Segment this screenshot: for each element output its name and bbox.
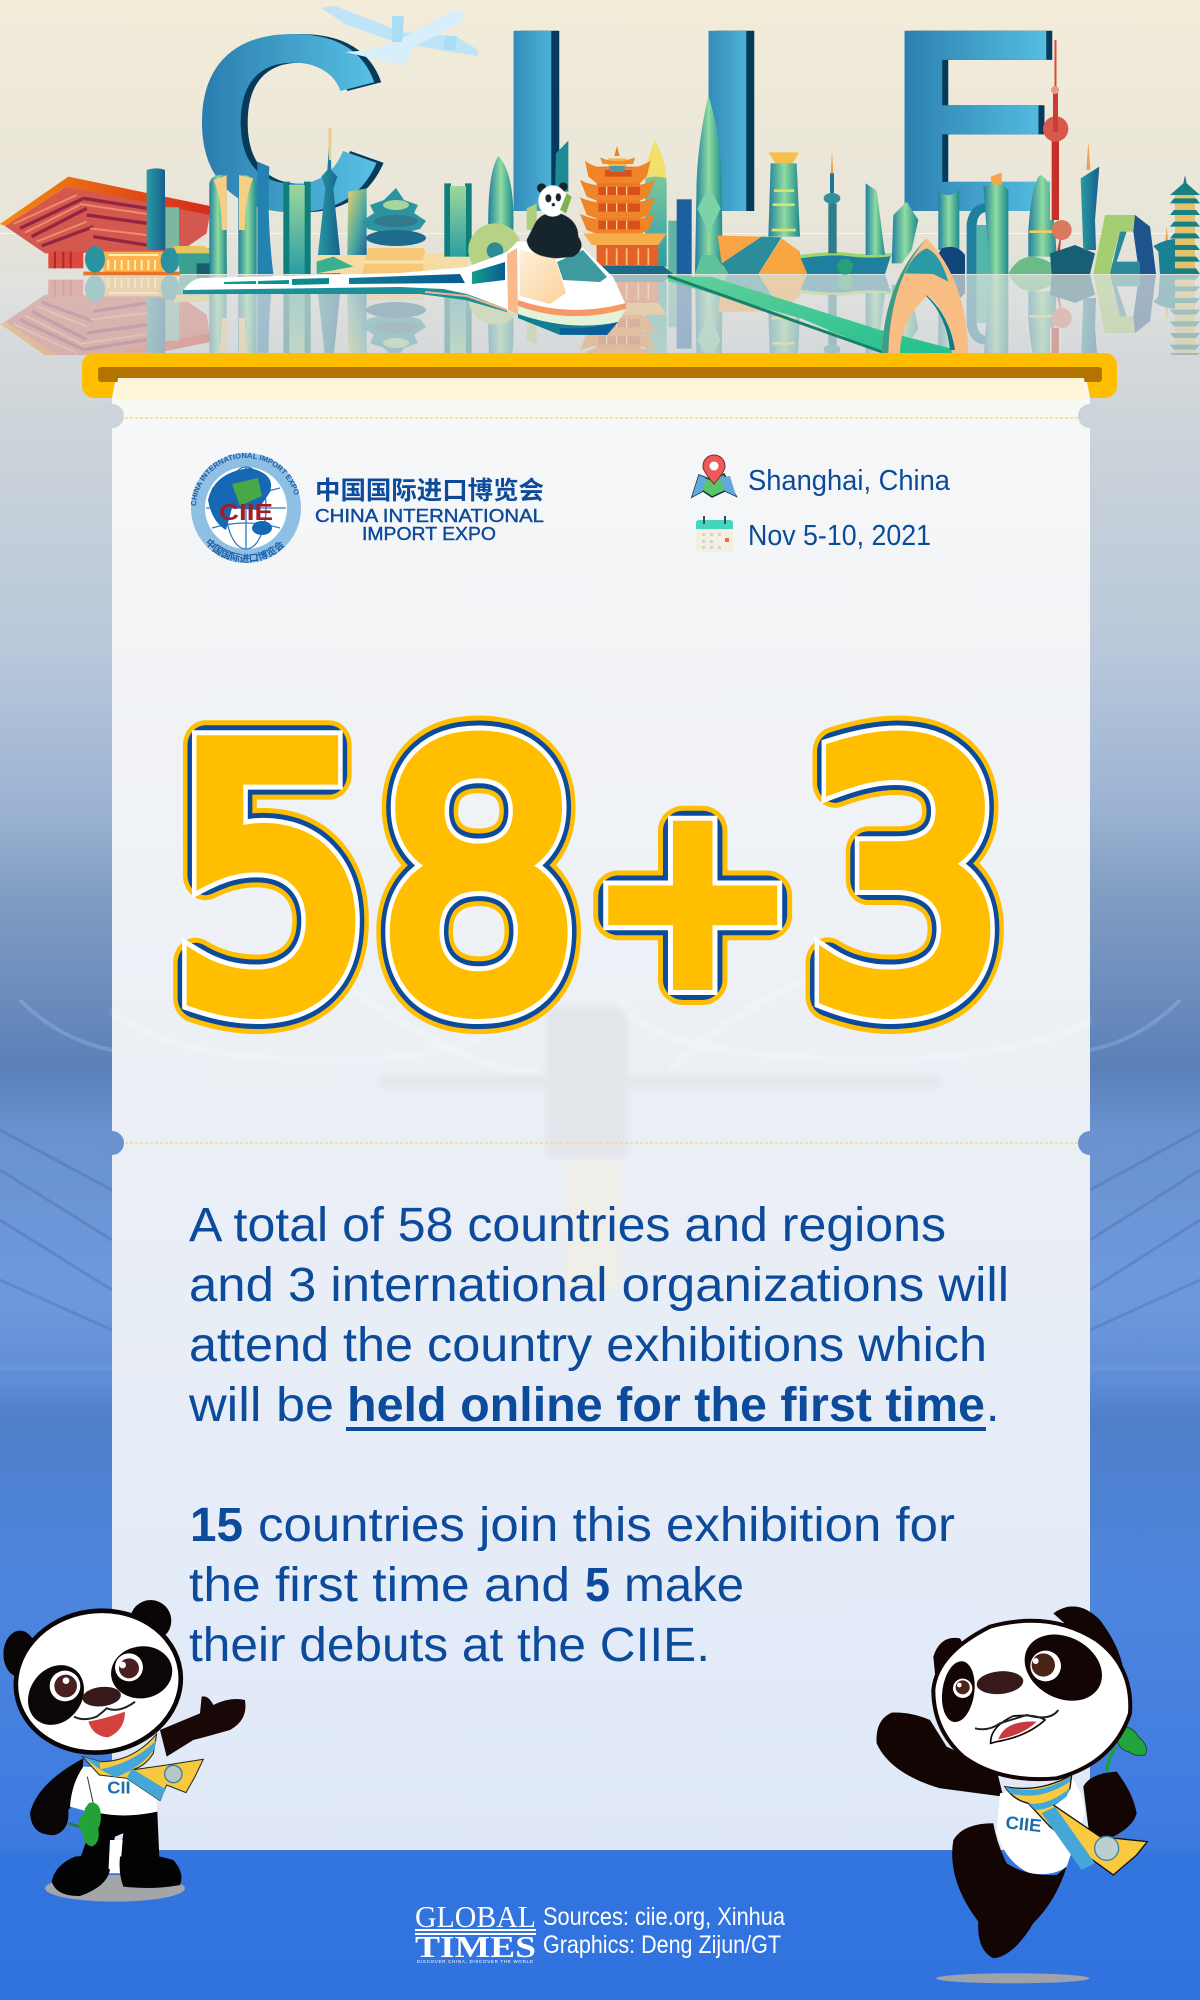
CIIE logo: CHINA INTERNATIONAL IMPORT EXPO <box>191 452 299 506</box>
paragraph: first-timers: 5 <box>585 1559 610 1612</box>
right section buildings <box>800 116 1200 275</box>
CIIE logo <box>191 452 301 563</box>
big number 58+3: + <box>593 760 792 1037</box>
pearl tower spire <box>1051 40 1059 132</box>
big number 58+3: 5 <box>171 675 374 1088</box>
date text: Nov 5-10, 2021 <box>748 520 931 552</box>
Global Times logo: GLOBAL <box>415 1899 536 1934</box>
city skyline <box>0 40 1200 277</box>
icon: map pin <box>692 455 736 497</box>
skyline reflection <box>0 275 1200 355</box>
big number 58+3: + <box>593 760 792 1037</box>
Global Times logo <box>415 1899 536 1964</box>
big number 58+3: 8 <box>377 675 580 1088</box>
big number 58+3 <box>171 675 1007 1088</box>
big number 58+3: 5 <box>171 675 374 1088</box>
scroll top bar <box>82 353 1117 398</box>
mascot: right panda <box>877 1606 1147 1983</box>
temple of heaven <box>362 188 430 274</box>
paragraph: first-timers: countries join this exhibition for <box>258 1499 955 1552</box>
logo wordmark: 中国国际进口博览会 <box>315 471 544 507</box>
big number 58+3: 8 <box>377 675 580 1088</box>
big number 58+3: 8 <box>377 675 580 1088</box>
bullet train <box>183 241 626 335</box>
paragraph: 58 countries: A total of 58 countries and regions <box>189 1199 946 1252</box>
source credits <box>543 1903 785 1959</box>
panel photo wash: national exhibition centre <box>112 960 1090 1290</box>
paragraph: first-timers <box>189 1499 955 1672</box>
bottom band <box>0 1851 1200 2000</box>
title letters CIIE <box>191 0 1068 267</box>
logo wordmark: IMPORT EXPO <box>362 524 496 544</box>
background photo: stadium roofs <box>0 1000 1200 1368</box>
CIIE logo: CIIE <box>219 499 273 525</box>
green road and arch bridge <box>668 238 972 354</box>
paragraph: first-timers: their debuts at the CIIE. <box>189 1619 710 1672</box>
paragraph: 58 countries: will be <box>188 1379 334 1432</box>
source credits: Sources: ciie.org, Xinhua <box>543 1903 785 1931</box>
oriental pearl tower <box>1043 116 1072 255</box>
paragraph: 58 countries: . <box>986 1379 999 1432</box>
mascot: left panda: CII <box>107 1777 131 1797</box>
left section buildings <box>0 127 403 275</box>
icon: airplane <box>321 6 478 66</box>
paragraph: 58 countries: attend the country exhibitions which <box>189 1319 987 1372</box>
source credits: Graphics: Deng Zijun/GT <box>543 1931 781 1959</box>
big number 58+3: 5 <box>171 675 374 1088</box>
yellow crane tower <box>580 146 673 274</box>
paragraph: 58 countries: held online for the first time <box>347 1379 985 1432</box>
centre section buildings <box>423 95 800 277</box>
paragraph: 58 countries <box>188 1199 1009 1432</box>
big number 58+3: 3 <box>804 675 1007 1088</box>
ground reflection floor <box>0 274 1200 364</box>
paragraph: first-timers: the first time and <box>189 1559 570 1612</box>
big number 58+3: + <box>593 760 792 1037</box>
big number 58+3: 8 <box>377 675 580 1088</box>
paragraph: first-timers: make <box>624 1559 744 1612</box>
big number 58+3: 5 <box>171 675 374 1088</box>
logo wordmark: CHINA INTERNATIONAL <box>315 506 544 526</box>
mascot: left panda <box>3 1600 245 1902</box>
paragraph: 58 countries: and 3 international organizations will <box>189 1259 1009 1312</box>
paragraph: first-timers: 15 <box>190 1499 243 1552</box>
big number 58+3: + <box>593 760 792 1037</box>
big number 58+3: 3 <box>804 675 1007 1088</box>
Global Times logo: DISCOVER CHINA, DISCOVER THE WORLD <box>417 1959 534 1964</box>
logo wordmark <box>315 471 544 544</box>
dashed dividers and notches <box>100 404 1102 1155</box>
panda on train <box>527 182 582 258</box>
icon: calendar <box>696 516 733 552</box>
Global Times logo: TIMES <box>415 1929 536 1964</box>
big number 58+3: 3 <box>804 675 1007 1088</box>
CIIE logo: 中国国际进口博览会 <box>206 538 284 563</box>
mascot: right panda: CIIE <box>1005 1812 1042 1836</box>
main panel <box>112 378 1090 1850</box>
location text: Shanghai, China <box>748 465 951 497</box>
big number 58+3: 3 <box>804 675 1007 1088</box>
